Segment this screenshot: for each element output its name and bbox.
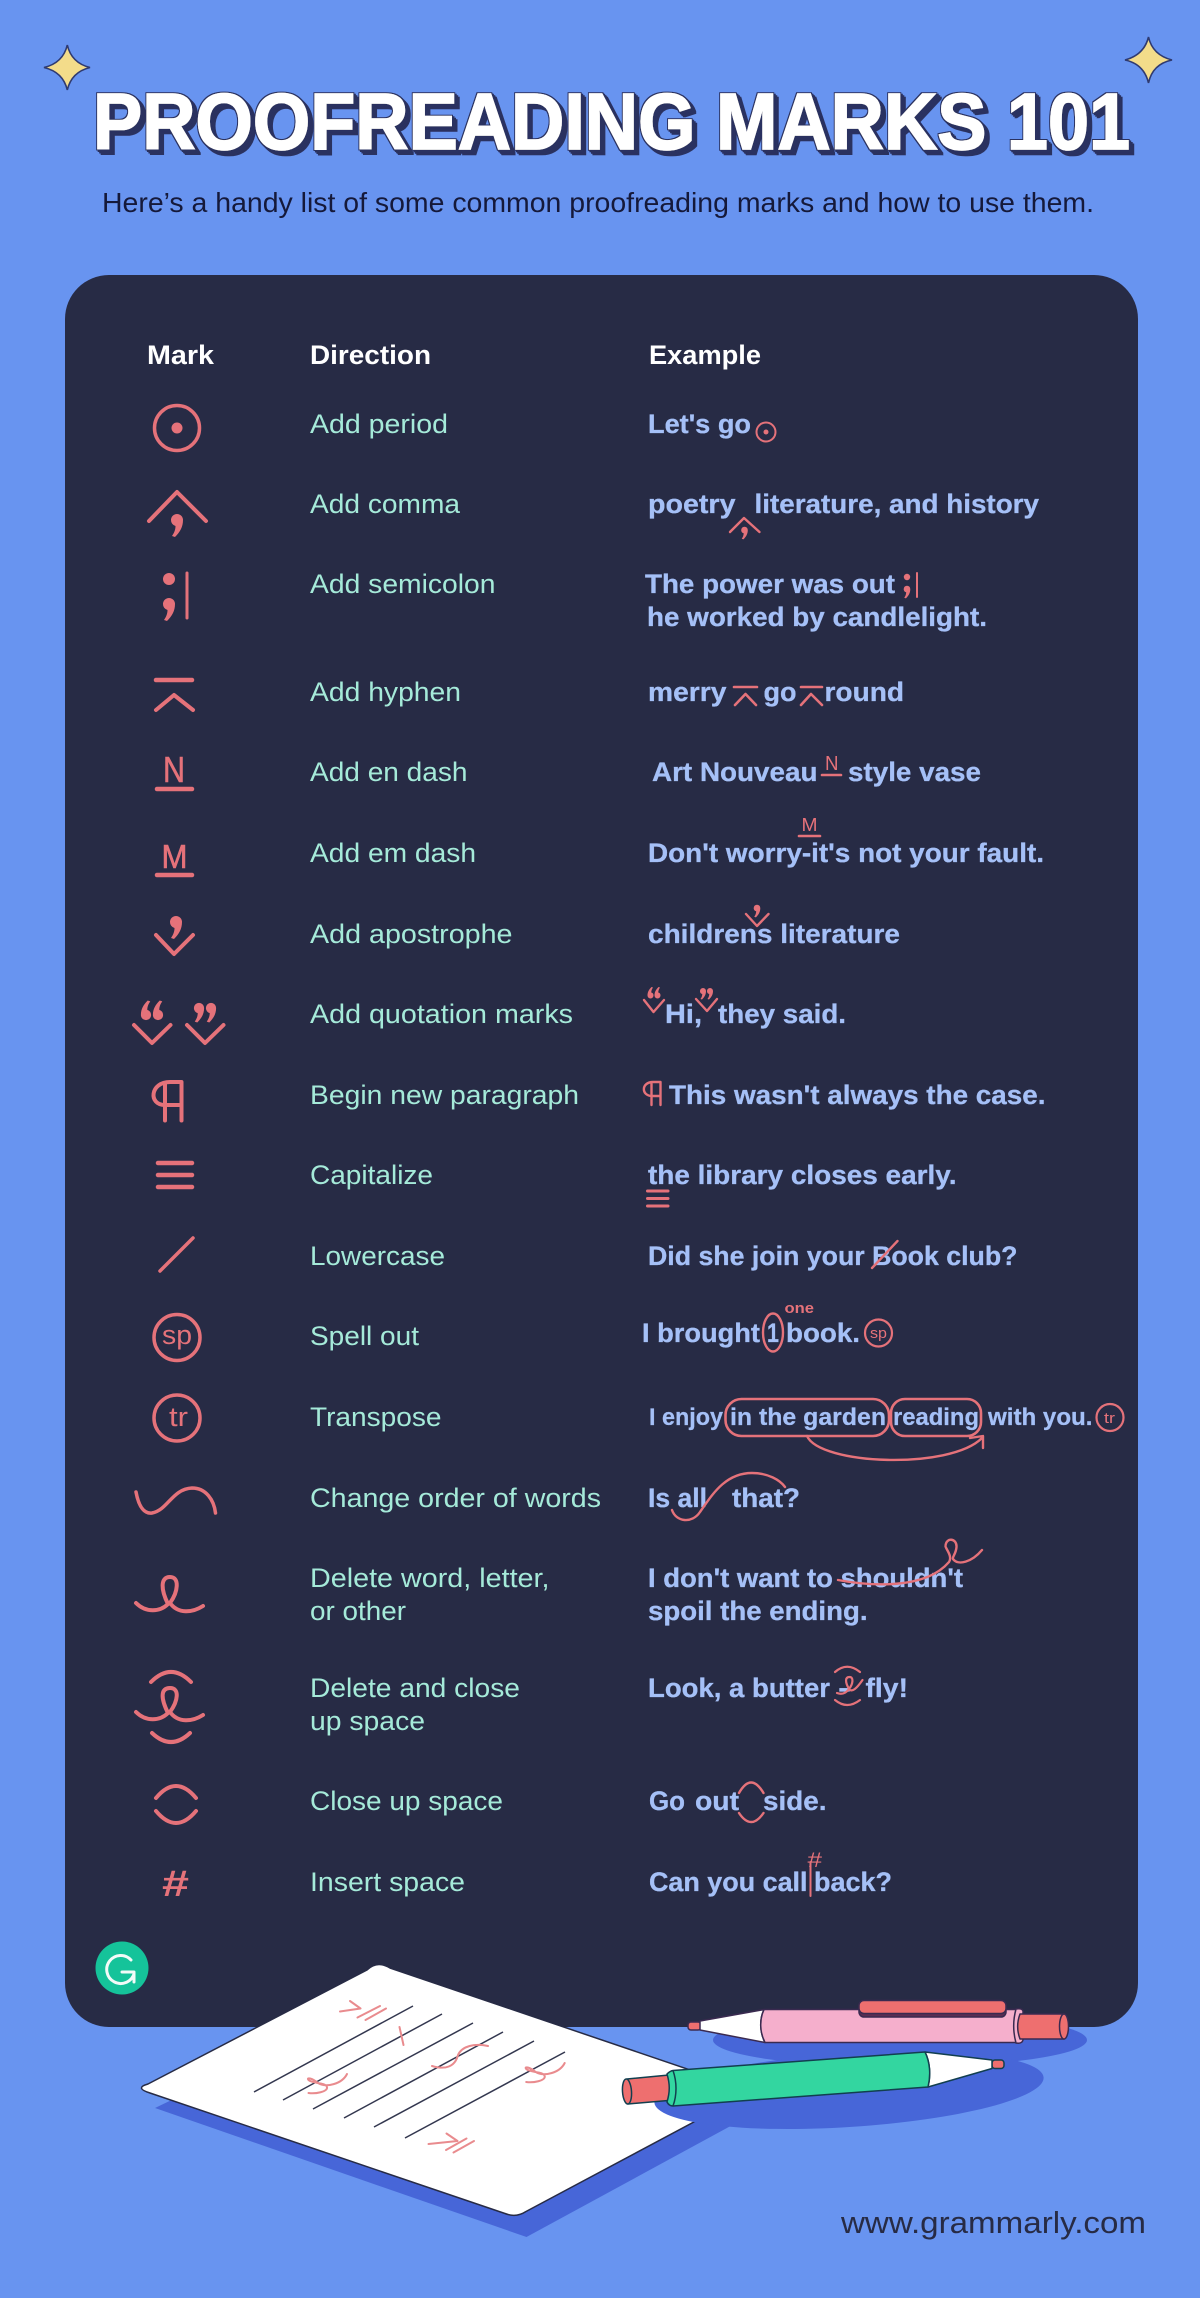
row: close up space: side. bbox=[763, 1786, 826, 1816]
panel: marks table bbox=[65, 275, 1138, 2027]
row: lowercase bbox=[160, 1238, 1018, 1271]
row: delete and close up space: fly! bbox=[866, 1673, 908, 1703]
row: transpose: in the garden bbox=[730, 1404, 886, 1431]
row: close up space: Go bbox=[649, 1786, 685, 1816]
row: add semicolon: he worked by candlelight. bbox=[647, 602, 987, 632]
row: add en dash: style vase bbox=[848, 757, 981, 787]
column heading: Direction: Direction bbox=[310, 340, 431, 370]
row: delete and close up space: Look, a butter bbox=[648, 1673, 830, 1703]
row: begin new paragraph bbox=[154, 1080, 1045, 1120]
column heading: Example: Example bbox=[649, 340, 761, 370]
illustration: paper sheet with marks bbox=[141, 1964, 752, 2215]
row: close up space bbox=[156, 1782, 826, 1823]
row: add en dash: Add en dash bbox=[310, 757, 468, 787]
row: spell out: one bbox=[784, 1300, 814, 1317]
row: add em dash: Add em dash bbox=[310, 838, 476, 868]
row: insert space bbox=[162, 1849, 892, 1904]
row: add semicolon: The power was out bbox=[645, 569, 895, 599]
row: change order of words bbox=[136, 1473, 800, 1520]
row: spell out: 1 bbox=[767, 1318, 779, 1348]
row: transpose bbox=[154, 1395, 1124, 1460]
title: PROOFREADING MARKS 101 bbox=[93, 77, 1130, 166]
row: transpose: Transpose bbox=[310, 1402, 442, 1432]
row: capitalize: Capitalize bbox=[310, 1160, 433, 1190]
row: lowercase: Did she join your Book club? bbox=[648, 1241, 1018, 1271]
row: change order of words: Change order of words bbox=[310, 1483, 601, 1513]
row: add en dash: N bbox=[163, 749, 185, 790]
row: transpose: tr bbox=[169, 1402, 188, 1432]
row: transpose: reading bbox=[893, 1404, 979, 1431]
row: add quotation marks: Add quotation marks bbox=[310, 999, 573, 1029]
row: transpose: tr bbox=[1104, 1410, 1115, 1427]
row: add hyphen: go bbox=[764, 677, 796, 707]
row: delete word: Delete word, letter, bbox=[310, 1563, 550, 1593]
row: transpose: with you. bbox=[987, 1404, 1092, 1431]
row: add comma: literature, and history bbox=[754, 489, 1039, 519]
row: delete word: I don't want to shouldn't bbox=[648, 1563, 963, 1593]
row: add quotation marks: they said. bbox=[718, 999, 846, 1029]
pink pen shadow bbox=[713, 2013, 1087, 2067]
row: change order of words: Is all bbox=[648, 1483, 707, 1513]
row: add em dash: M bbox=[802, 814, 818, 835]
row: spell out: sp bbox=[870, 1325, 887, 1342]
row: add period bbox=[154, 406, 776, 450]
row: add apostrophe: Add apostrophe bbox=[310, 919, 512, 949]
icon: Grammarly logo bbox=[96, 1942, 148, 1994]
illustration: pink pen bbox=[688, 2000, 1068, 2043]
illustration: paper sheet shadow bbox=[155, 1990, 760, 2237]
column heading: Mark: Mark bbox=[147, 340, 214, 370]
row: begin new paragraph: Begin new paragraph bbox=[310, 1080, 579, 1110]
row: add en dash: N bbox=[825, 753, 838, 775]
row: delete and close up space: - bbox=[838, 1673, 851, 1703]
green pen shadow bbox=[652, 2040, 1046, 2140]
row: spell out: I brought bbox=[642, 1318, 760, 1348]
row: delete and close up space: Delete and close bbox=[310, 1673, 520, 1703]
row: add apostrophe: childrens literature bbox=[648, 919, 900, 949]
row: insert space: Insert space bbox=[310, 1867, 465, 1897]
row: spell out: Spell out bbox=[310, 1321, 420, 1351]
row: delete word: or other bbox=[310, 1596, 406, 1626]
row: add apostrophe bbox=[156, 905, 900, 954]
row: insert space: back? bbox=[814, 1867, 892, 1897]
row: insert space: # bbox=[162, 1863, 189, 1904]
row: add period: Add period bbox=[310, 409, 448, 439]
subtitle: Here’s a handy list of some common proofreading marks and how to use them. bbox=[102, 187, 1094, 218]
row: delete and close up space: up space bbox=[310, 1706, 425, 1736]
row: insert space: Can you call bbox=[649, 1867, 808, 1897]
row: transpose: I enjoy bbox=[649, 1404, 724, 1431]
row: delete word: spoil the ending. bbox=[648, 1596, 868, 1626]
row: add hyphen: round bbox=[824, 677, 904, 707]
icon: right sparkle bbox=[1125, 37, 1172, 83]
row: add semicolon bbox=[163, 569, 987, 632]
row: add semicolon: Add semicolon bbox=[310, 569, 496, 599]
illustration: green pen bbox=[622, 2052, 1004, 2106]
row: add em dash: Don't worry-it's not your fault. bbox=[648, 838, 1044, 868]
row: spell out bbox=[154, 1300, 892, 1360]
row: spell out: book. bbox=[786, 1318, 860, 1348]
row: add hyphen: merry bbox=[648, 677, 726, 707]
icon: left sparkle bbox=[44, 45, 90, 90]
row: add en dash bbox=[157, 749, 981, 790]
row: add quotation marks bbox=[134, 987, 846, 1043]
row: add em dash bbox=[157, 814, 1044, 876]
row: add hyphen bbox=[156, 677, 904, 710]
row: add comma: poetry bbox=[648, 489, 736, 519]
website url: www.grammarly.com bbox=[840, 2205, 1146, 2240]
row: capitalize: the library closes early. bbox=[648, 1160, 956, 1190]
row: add quotation marks: Hi, bbox=[665, 999, 702, 1029]
row: add en dash: Art Nouveau bbox=[652, 757, 818, 787]
row: add comma: Add comma bbox=[310, 489, 461, 519]
row: add comma bbox=[149, 489, 1039, 539]
row: insert space: # bbox=[808, 1849, 822, 1872]
row: change order of words: that? bbox=[732, 1483, 800, 1513]
row: add period: Let's go bbox=[648, 409, 751, 439]
row: delete word bbox=[136, 1540, 982, 1626]
row: add hyphen: Add hyphen bbox=[310, 677, 461, 707]
row: capitalize bbox=[158, 1160, 956, 1206]
row: lowercase: Lowercase bbox=[310, 1241, 445, 1271]
row: delete and close up space bbox=[136, 1667, 908, 1742]
row: add em dash: M bbox=[162, 839, 188, 876]
row: close up space: out bbox=[695, 1786, 739, 1816]
row: begin new paragraph: This wasn't always the case. bbox=[669, 1080, 1046, 1110]
row: close up space: Close up space bbox=[310, 1786, 503, 1816]
row: spell out: sp bbox=[162, 1320, 192, 1350]
